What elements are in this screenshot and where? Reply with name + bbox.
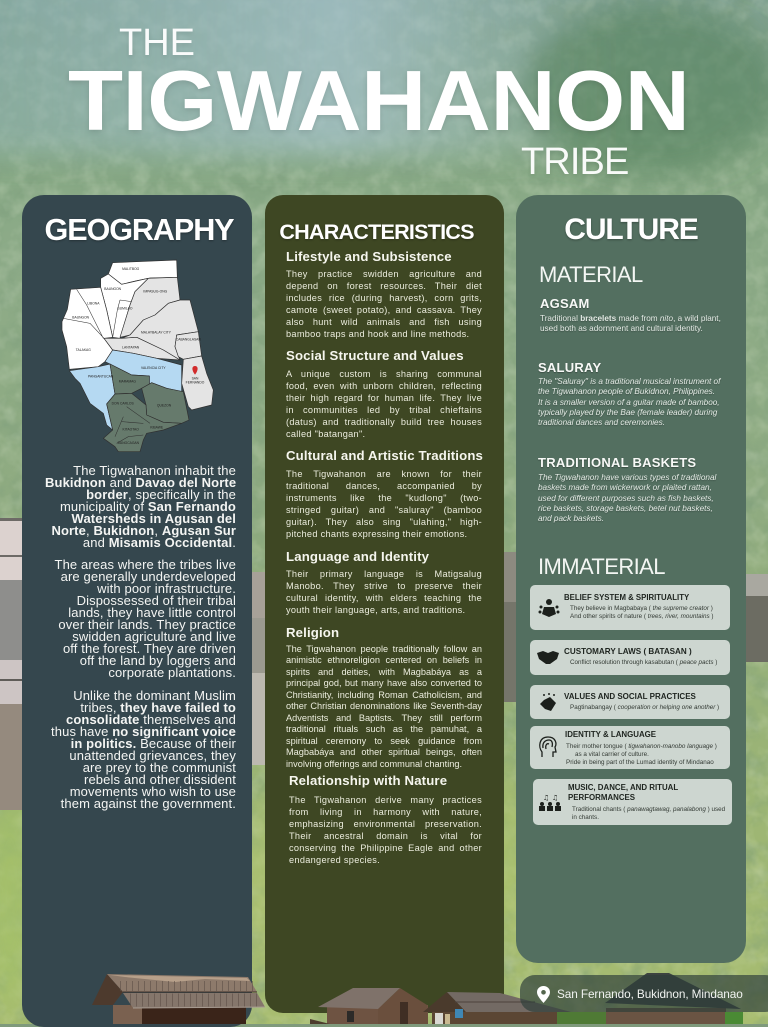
heading: geography: GEOGRAPHY: [44, 213, 234, 247]
text block: geography paragraph 3: them against the government.: [61, 796, 236, 811]
text block: relationship with nature: Their ancestral domain is vital for: [289, 831, 482, 841]
text block: cultural traditions: pitched chants expressing their emotions.: [286, 529, 467, 539]
building behind gap one: [252, 572, 265, 765]
text block: cultural traditions: stringed guitar) and "saluray" (bamboo: [286, 505, 482, 515]
item: saluray: SALURAY: [538, 360, 601, 375]
card text: [570, 605, 714, 620]
text block: traditional baskets: and pack baskets.: [538, 514, 604, 523]
text block: cultural traditions: The Tigwahanon are known for their: [286, 469, 482, 479]
left-edge buildings: [0, 518, 22, 810]
map of Bukidnon: KITAOTAO: [122, 427, 139, 431]
card title: VALUES AND SOCIAL PRACTICES: [564, 692, 696, 701]
text block: cultural traditions: guitar). They also sing "ulahing," high-: [286, 517, 482, 527]
house far right: [605, 973, 741, 1024]
text block: language: [286, 569, 482, 615]
panel: characteristics: [265, 195, 504, 1013]
text block: geography paragraph 2: corporate plantations.: [108, 665, 236, 680]
card title: CUSTOMARY LAWS ( BATASAN ): [564, 647, 692, 656]
map of Bukidnon: QUEZON: [157, 404, 172, 408]
text block: traditional baskets: The Tigwahanon have various types of traditional: [538, 473, 716, 482]
text block: relationship with nature: from living in harmony with nature,: [289, 807, 482, 817]
card title: PERFORMANCES: [568, 793, 635, 802]
text block: relationship with nature: The Tigwahanon derive many practices: [289, 795, 482, 805]
text block: relationship with nature: [289, 795, 482, 865]
text block: saluray: traditional dances and ceremonies.: [538, 418, 665, 427]
text block: religion: spirits and deities, with Magbabáya as a: [286, 667, 482, 677]
title line: TIGWAHANON: TIGWAHANON: [68, 54, 689, 149]
text block: geography paragraph 3: Unlike the dominant Muslim: [73, 688, 236, 703]
heading: religion: Religion: [286, 625, 339, 640]
text block: geography paragraph 2: Dispossessed of their tribal: [77, 593, 236, 608]
heading: lifestyle: Lifestyle and Subsistence: [286, 249, 452, 264]
card text: [572, 806, 725, 821]
text block: lifestyle: [286, 269, 482, 339]
map of Bukidnon: [62, 260, 214, 452]
map of Bukidnon: BAUNGON: [104, 287, 122, 291]
house right: [423, 992, 571, 1024]
card text: [566, 743, 717, 766]
panel: geography: [22, 195, 252, 1027]
text block: relationship with nature: conserving the Philippine Eagle and other: [289, 843, 482, 853]
heading: language: Language and Identity: [286, 549, 429, 564]
icon: worship: [538, 599, 560, 617]
text block: geography paragraph 1: Bukidnon and Davao del Norte: [45, 475, 236, 490]
text block: geography paragraph 3: rebels and other dissident: [84, 772, 236, 787]
text block: geography paragraph 2: are generally underdeveloped: [61, 569, 236, 584]
card: belief system: [530, 585, 730, 630]
icon: location pin: [537, 986, 550, 1003]
card text: Pagtinabangay ( cooperation or helping one another ): [570, 704, 719, 711]
text block: lifestyle: includes rice (during harvest), corn grits,: [286, 293, 482, 303]
card: identity and language: [530, 726, 730, 769]
text block: geography paragraph 3: unattended grievances, they: [69, 748, 236, 763]
text block: saluray: The "Saluray" is a traditional musical instrument of: [538, 377, 720, 386]
text block: geography paragraph 1: border, specifically in the: [86, 487, 236, 502]
text block: religion: Adventists and Baptists. They still perform: [286, 713, 482, 723]
text block: geography paragraph 1: The Tigwahanon inhabit the: [73, 463, 236, 478]
text block: geography paragraph 2: lands, they have little control: [68, 605, 236, 620]
text block: religion: Christianity, including Roman Catholicism, and: [286, 690, 482, 700]
map of Bukidnon: FERNANDO: [186, 380, 205, 384]
heading: cultural traditions: Cultural and Artistic Traditions: [286, 448, 483, 463]
item: agsam: AGSAM: [540, 296, 590, 311]
text block: language: Manobo. They strive to preserve their: [286, 581, 482, 591]
card text: They believe in Magbabaya ( the supreme creator ): [570, 605, 713, 612]
text block: saluray: typically played by the Bae (female leader) during: [538, 408, 717, 417]
text block: lifestyle: also hunt wild animals and fish using: [286, 317, 482, 327]
text block: religion: traditional rituals such as the pamuhat, a: [286, 724, 482, 734]
text block: social structure: [286, 369, 482, 439]
icon: musicians: ♫: [543, 794, 549, 802]
map of Bukidnon: MALITBOG: [122, 267, 140, 271]
card text: Pride in being part of the Lumad identity of Mindanao: [566, 759, 714, 766]
text block: geography paragraph 2: with poor infrastructure.: [97, 581, 236, 596]
card: customary laws: [530, 640, 730, 675]
text block: geography paragraph 2: off the land by loggers and: [80, 653, 236, 668]
panel: culture: [516, 195, 746, 963]
text block: cultural traditions: instruments like the "kudlong" (two-: [286, 493, 482, 503]
text block: lifestyle: They practice swidden agriculture and: [286, 269, 482, 279]
text block: lifestyle: bamboo traps and hook and line methods.: [286, 329, 469, 339]
title line: TRIBE: TRIBE: [521, 141, 628, 183]
card: music, dance and ritual: [533, 779, 732, 825]
right-edge building: [746, 574, 768, 662]
heading: material: MATERIAL: [539, 262, 643, 287]
map of Bukidnon: SAN: [192, 376, 199, 380]
card text: And other spirits of nature ( trees, river, mountains ): [570, 613, 714, 620]
text block: religion: principal god, but many have also converted to: [286, 678, 482, 688]
heading: culture: CULTURE: [564, 213, 698, 246]
text block: religion: [286, 644, 482, 769]
map of Bukidnon: PANGANTUCAN: [88, 375, 114, 379]
map of Bukidnon: KIBAWE: [150, 425, 164, 429]
text block: language: Their primary language is Matigsalug: [286, 569, 482, 579]
text block: language: cultural identity, with elders teaching the: [286, 593, 482, 603]
text block: social structure: their high regard for human life. They live: [286, 393, 482, 403]
house middle: [310, 988, 428, 1024]
text block: geography paragraph 3: thus have no significant voice: [51, 724, 236, 739]
card text: Traditional chants ( panawagtawag, panalabong ) used: [572, 806, 725, 813]
card: values and social practices: [530, 685, 730, 719]
item: traditional baskets: TRADITIONAL BASKETS: [538, 455, 696, 470]
text block: geography paragraph 3: movements who wish to use: [70, 784, 236, 799]
icon: musicians: [539, 794, 561, 811]
text block: geography paragraph 2: The areas where the tribes live: [55, 557, 236, 572]
text block: geography paragraph 3: are prey to the communist: [83, 760, 236, 775]
icon: handshake: [537, 651, 559, 664]
map of Bukidnon: TALAKAG: [76, 348, 91, 352]
text block: geography paragraph 3: consolidate themselves and: [66, 712, 236, 727]
houses: [92, 973, 743, 1024]
text block: traditional baskets: [538, 473, 716, 524]
text block: geography paragraph 3: tribes, they have failed to: [80, 700, 236, 715]
house left: [92, 974, 265, 1024]
text block: social structure: called "batangan".: [286, 429, 365, 439]
text block: traditional baskets: used for different purposes such as fish baskets,: [538, 494, 714, 503]
icon: head with fingerprint: [539, 736, 557, 757]
card title: IDENTITY & LANGUAGE: [565, 730, 656, 739]
text block: lifestyle: camote (sweet potato), and cassava. They: [286, 305, 482, 315]
text block: geography paragraph 2: over their lands. They practice: [58, 617, 236, 632]
card title: [568, 783, 678, 802]
card text: Their mother tongue ( tigwahanon-manobo language ): [566, 743, 717, 750]
text block: social structure: food, even with unborn children, reflecting: [286, 381, 482, 391]
text block: religion: The Tigwahanon people traditionally follow an: [286, 644, 482, 654]
card text: as a vital carrier of culture.: [575, 751, 649, 758]
text block: geography paragraph 2: off the forest. They are driven: [63, 641, 236, 656]
text block: cultural traditions: [286, 469, 482, 539]
card text: Conflict resolution through kasabutan ( peace pacts ): [570, 659, 717, 666]
text block: language: youth their language, arts, and traditions.: [286, 605, 465, 615]
text block: saluray: It is a smaller version of a guitar made of bamboo,: [538, 398, 720, 407]
text block: geography paragraph 2: swidden agriculture and live: [72, 629, 236, 644]
map of Bukidnon: BAUNGON: [72, 315, 90, 319]
text block: social structure: in communities led by tribal chieftains: [286, 405, 482, 415]
map of Bukidnon: LIBONA: [87, 301, 100, 305]
text block: religion: spiritual ceremony to seek guidance from: [286, 736, 482, 746]
card title: MUSIC, DANCE, AND RITUAL: [568, 783, 678, 792]
location text: San Fernando, Bukidnon, Mindanao: [557, 987, 743, 1001]
card title: BELIEF SYSTEM & SPIRITUALITY: [564, 593, 689, 602]
title line: THE: THE: [119, 22, 195, 64]
text block: geography paragraph 1: [45, 463, 236, 550]
map of Bukidnon: DANGCAGAN: [118, 441, 140, 445]
text block: religion: Magbabáya and other spiritual beings, often: [286, 747, 482, 757]
card text: in chants.: [572, 814, 599, 821]
text block: saluray: [538, 377, 722, 427]
text block: agsam: Traditional bracelets made from nito, a wild plant,: [540, 314, 721, 323]
text block: agsam: used both as adornment and cultural identity.: [540, 324, 703, 333]
foliage at foot of houses: [557, 1012, 743, 1024]
text block: lifestyle: depend on forest resources. Their diet: [286, 281, 482, 291]
text block: relationship with nature: emphasizing environmental preservation.: [289, 819, 482, 829]
heading: relationship with nature: Relationship with Nature: [289, 773, 447, 788]
text block: geography paragraph 3: [51, 688, 236, 811]
text block: geography paragraph 2: [54, 557, 236, 680]
map of Bukidnon: LANTAPAN: [122, 345, 140, 349]
heading: social structure: Social Structure and Values: [286, 348, 464, 363]
text block: geography paragraph 1: Norte, Bukidnon, Agusan Sur: [51, 523, 236, 538]
text block: social structure: (datus) and traditionally build tree houses: [286, 417, 482, 427]
icon: musicians: ♫: [552, 794, 558, 802]
text block: relationship with nature: endangered species.: [289, 855, 380, 865]
map of Bukidnon: VALENCIA CITY: [141, 366, 166, 370]
icon: helping hands: [540, 693, 556, 711]
title: [68, 22, 689, 183]
map of Bukidnon: CABANGLASAN: [176, 338, 201, 342]
text block: traditional baskets: baskets made from wickerwork or plaited rattan,: [538, 483, 712, 492]
heading: characteristics: CHARACTERISTICS: [279, 219, 474, 244]
text block: geography paragraph 1: municipality of San Fernando: [60, 499, 236, 514]
text block: agsam: [540, 314, 721, 334]
map of Bukidnon: SUMILAO: [118, 306, 133, 310]
text block: religion: other Christian denominations like Seventh-day: [286, 701, 482, 711]
map of Bukidnon: IMPASUG-ONG: [143, 290, 168, 294]
building behind gap two: [504, 552, 516, 702]
text block: geography paragraph 1: and Misamis Occidental.: [83, 535, 236, 550]
map of Bukidnon: MARAMAG: [119, 379, 136, 383]
text block: cultural traditions: traditional dances, accompanied by: [286, 481, 482, 491]
text block: saluray: the Tigwahanon people of Bukidnon, Philippines.: [538, 387, 715, 396]
map of Bukidnon: MALAYBALAY CITY: [141, 330, 172, 334]
text block: social structure: A unique custom is sharing communal: [286, 369, 482, 379]
heading: immaterial: IMMATERIAL: [538, 554, 665, 579]
text block: religion: animistic ethnoreligion centered on beliefs in: [286, 655, 482, 665]
map of Bukidnon: DON CARLOS: [112, 401, 134, 405]
location pill: [520, 975, 768, 1012]
text block: traditional baskets: rice baskets, storage baskets, betel nut baskets,: [538, 504, 713, 513]
text block: geography paragraph 1: Watersheds in Agusan del: [72, 511, 236, 526]
text block: geography paragraph 3: in politics. Because of their: [71, 736, 236, 751]
text block: religion: involving offerings and communal chanting.: [286, 759, 462, 769]
